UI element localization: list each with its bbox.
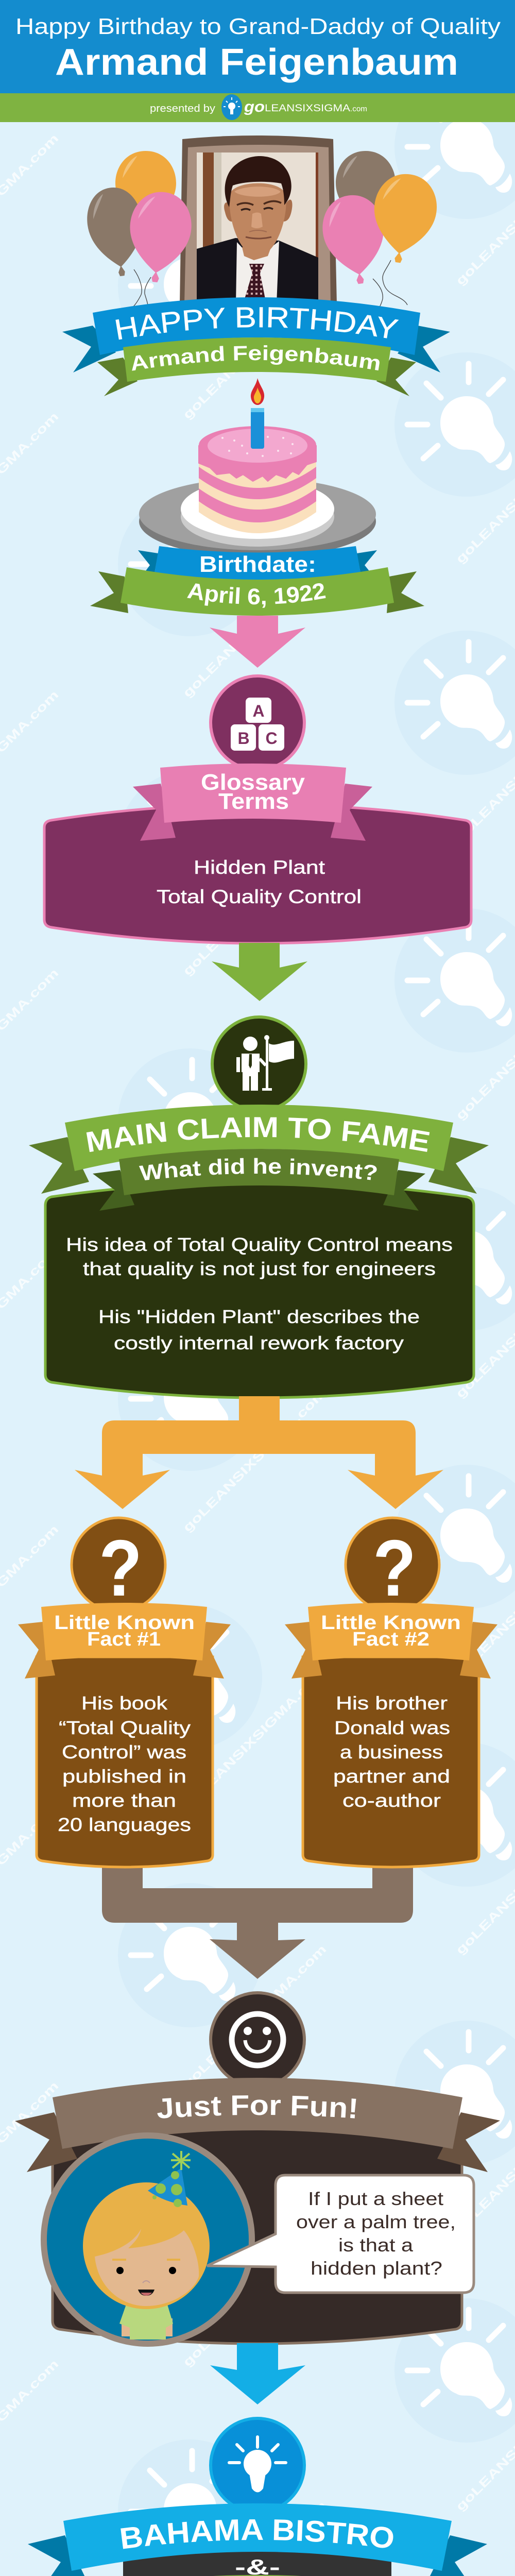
watermark logo text: goLEANSIXSIGMA.com (180, 273, 329, 422)
logo: go (244, 98, 265, 115)
speech bubble: hidden plant? (311, 2258, 442, 2279)
ribbon: what did he invent (93, 1149, 425, 1211)
glossary heading (201, 770, 305, 814)
birthdate label: Birthdate: (199, 552, 316, 577)
ribbon: armand feigenbaum (213, 2575, 301, 2576)
arrow: blue (210, 2343, 305, 2404)
portrait hair (225, 156, 291, 207)
portrait shirt (236, 241, 279, 304)
fact 2 text: His brother (336, 1692, 448, 1714)
logo: LEANSIXSIGMA (265, 103, 350, 114)
portrait tie (243, 264, 266, 304)
fact 1 text: “Total Quality (59, 1717, 191, 1738)
main claim text (66, 1234, 453, 1353)
watermark logo text: goLEANSIXSIGMA.com (180, 551, 329, 700)
icon: question mark: ? (99, 1523, 142, 1613)
portrait suit (197, 238, 318, 304)
fact 1 text: 20 languages (58, 1814, 191, 1835)
dark band behind ampersand (123, 2550, 391, 2576)
speech bubble: If I put a sheet (308, 2188, 443, 2209)
fact 2 text: a business (340, 1741, 443, 1762)
candle (251, 378, 264, 449)
portrait ears (224, 199, 293, 222)
picture frame with portrait (180, 135, 337, 304)
icon: smiley (211, 1993, 304, 2087)
icon: question mark: ? (373, 1523, 416, 1613)
birthday cake (139, 378, 376, 557)
watermark logo text: goLEANSIXSIGMA.com (180, 1942, 329, 2091)
happy birthday ribbon (62, 297, 450, 396)
watermark logo text: goLEANSIXSIGMA.com (180, 1386, 329, 1535)
panel: just for fun (15, 2078, 500, 2347)
glossary terms text: Hidden Plant (194, 857, 325, 878)
speech bubble: over a palm tree, (296, 2211, 456, 2232)
balloons behind the frame (115, 151, 396, 235)
birthdate value: April 6, 1922 (187, 583, 325, 608)
fact 2 text (333, 1692, 450, 1811)
header (0, 0, 515, 122)
main claim text: that quality is not just for engineers (83, 1258, 436, 1279)
ribbon: just for fun: Just For Fun! (157, 2095, 356, 2119)
ribbon: what did he invent: What did he invent? (139, 1158, 377, 1180)
fact 1 text (58, 1692, 191, 1835)
ribbon: main claim (29, 1105, 489, 1194)
panel: fact 1 (18, 1518, 231, 1867)
watermark logo text: goLEANSIXSIGMA.com (180, 1108, 329, 1257)
arrow: green (212, 943, 307, 1001)
watermark logo text: goLEANSIXSIGMA.com (180, 829, 329, 978)
ribbon: main claim: MAIN CLAIM TO FAME (87, 1117, 430, 1152)
watermark logo text: goLEANSIXSIGMA.com (180, 1664, 329, 1813)
title line 2: Armand Feigenbaum (55, 42, 458, 83)
fact 2 text: Donald was (334, 1717, 450, 1738)
panel: fact 2 (285, 1518, 497, 1867)
ribbon: fact 2: Little Known (321, 1612, 461, 1634)
arrow: orange split (75, 1396, 443, 1509)
glossary heading: Terms (218, 789, 289, 814)
glossary terms text (157, 857, 362, 907)
main claim text: His idea of Total Quality Control means (66, 1234, 453, 1255)
ribbon: bahama bistro: BAHAMA BISTRO (121, 2519, 393, 2549)
icon: glossary abc blocks: C (265, 729, 278, 748)
watermark light bulbs (118, 75, 515, 2576)
balloons in front of the frame (83, 170, 441, 307)
portrait face (230, 183, 286, 256)
ribbon: just for fun (15, 2078, 500, 2172)
glossary heading: Glossary (201, 770, 305, 795)
connector: brown merge arrow (102, 1862, 413, 1979)
main claim text: costly internal rework factory (114, 1332, 404, 1353)
icon: light bulb (211, 2418, 304, 2512)
character: boy with party hat (44, 2136, 252, 2344)
icon: glossary abc blocks: B (237, 729, 250, 748)
ribbon: fact 2 (285, 1603, 497, 1679)
fact 1 text: published in (62, 1766, 186, 1787)
panel: main claim to fame (29, 1105, 489, 1399)
happy birthday text: HAPPY BIRTHDAY (115, 307, 399, 340)
glossary terms text: Total Quality Control (157, 886, 362, 907)
ribbon: fact 2: Fact #2 (352, 1629, 430, 1650)
birthdate ribbon (90, 546, 424, 616)
ribbon: fact 1: Little Known (54, 1612, 195, 1634)
fact 1 text: His book (81, 1692, 168, 1714)
logo: .com (350, 105, 367, 113)
fact 1 text: more than (72, 1790, 176, 1811)
fact 2 text: co-author (342, 1790, 441, 1811)
panel: glossary (44, 764, 471, 943)
logo (221, 94, 367, 120)
name text: Armand Feigenbaum (132, 345, 380, 371)
icon: glossary abc blocks: A (252, 702, 265, 720)
title line 1: Happy Birthday to Grand-Daddy of Quality (15, 14, 501, 39)
main claim text: His "Hidden Plant" describes the (98, 1306, 420, 1327)
speech bubble (207, 2175, 474, 2293)
ribbon: fact 1: Fact #1 (87, 1629, 161, 1650)
arrow: pink (210, 616, 305, 668)
icon: person with flag (212, 1017, 306, 1111)
presented by: presented by (150, 103, 215, 114)
icon: glossary abc blocks (211, 676, 304, 770)
watermark logo text: goLEANSIXSIGMA.com (180, 2221, 329, 2369)
ribbon: fact 1 (18, 1603, 231, 1679)
fact 2 text: partner and (333, 1766, 450, 1787)
speech bubble: is that a (338, 2234, 414, 2256)
fact 1 text: Control” was (62, 1741, 186, 1762)
ribbon: bahama bistro (28, 2503, 487, 2576)
portrait wall (197, 152, 316, 304)
